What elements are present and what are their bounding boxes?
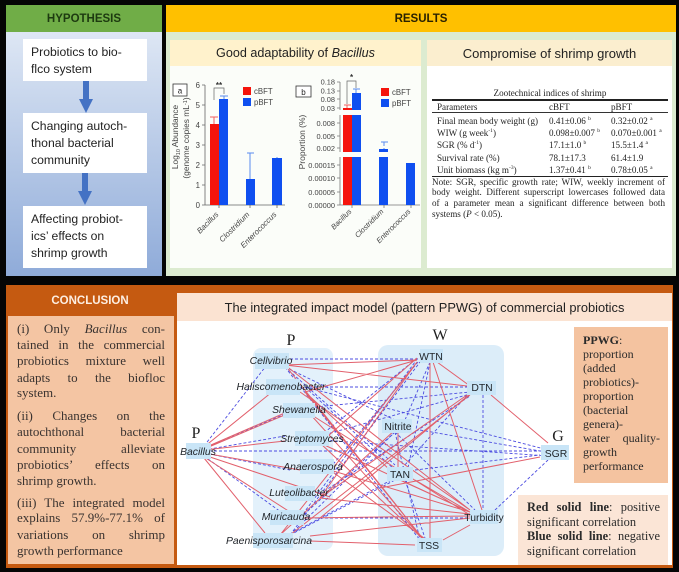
panel: hypothesis [6, 5, 162, 276]
group letters: G [552, 428, 564, 445]
text block: conclusion point i: probiotics mixture well [17, 353, 165, 368]
table: zootechnical indices: cBFT [549, 102, 570, 112]
panel: good adaptability of Bacillus [170, 40, 421, 268]
chart b: proportion bar chart: b [301, 88, 306, 97]
heading: hypothesis [6, 5, 162, 32]
chart a: log abundance bar chart: a [178, 86, 183, 96]
arrow: hypothesis step 1 to 2 [79, 81, 93, 113]
node backgrounds [186, 349, 569, 552]
group letters: P [287, 332, 296, 349]
legend: line colours: significant correlation [527, 544, 636, 558]
callout: PPWG definition: genera)- [583, 417, 623, 431]
text block: conclusion point ii: probiotics’ effects on [17, 457, 165, 472]
panel: results [166, 5, 676, 276]
table: zootechnical indices: pBFT [611, 102, 632, 112]
chart b: proportion bar chart: 0.00010 [308, 174, 335, 183]
node labels: bacterial genera [180, 356, 344, 547]
chart a: log abundance bar chart: 5 [196, 101, 201, 110]
text block: conclusion point ii: shrimp growth. [17, 473, 96, 488]
table: zootechnical indices: Parameters [437, 102, 477, 112]
chart b: proportion bar chart: 0.08 [321, 95, 335, 104]
group letters: P [192, 425, 201, 442]
chart a: log abundance bar chart: 3 [196, 141, 200, 150]
arrow: hypothesis step 2 to 3 [78, 173, 92, 205]
node labels: water quality and growth: TAN [390, 470, 410, 481]
table: zootechnical indices: 78.1±17.3 [549, 153, 586, 163]
table: zootechnical indices: Note: SGR, specific growth rate; WIW, weekly increment of [432, 177, 665, 187]
text block: affecting probiotics effects [23, 206, 147, 268]
heading: conclusion: CONCLUSION [51, 294, 129, 306]
table: zootechnical indices: Final mean body weight (g) [437, 116, 538, 126]
text block: changing bacterial community [23, 113, 147, 173]
callout: PPWG definition: probiotics)- [583, 375, 639, 389]
text block: conclusion point iii: (iii) The integrated model [17, 495, 165, 510]
table: zootechnical indices: Zootechnical indices of shrimp [494, 88, 606, 98]
callout: PPWG definition: growth [583, 445, 617, 459]
node labels: bacterial genera: Paenisporosarcina [226, 536, 312, 547]
group letters [192, 327, 564, 445]
panel: conclusion [6, 285, 673, 568]
callout: PPWG definition: (added [583, 361, 616, 375]
text block: probiotics to biofloc system: Probiotics to bio- [31, 45, 122, 59]
callout: PPWG definition [574, 327, 668, 483]
legend: line colours: significant correlation [527, 515, 636, 529]
node labels: bacterial genera: Streptomyces [280, 434, 344, 445]
node labels: water quality and growth [384, 352, 568, 552]
node labels: bacterial genera: Bacillus [180, 447, 216, 458]
chart b: proportion bar chart: 0.008 [316, 119, 335, 128]
chart b: proportion bar chart: 0.002 [316, 144, 335, 153]
group letters: W [432, 327, 448, 344]
node labels: water quality and growth: SGR [545, 449, 568, 460]
chart b: proportion bar chart: cBFT [392, 88, 411, 97]
heading: integrated impact model [177, 293, 672, 321]
table: zootechnical indices: 0.098±0.007 b [549, 128, 600, 138]
chart b: proportion bar chart: 0.00000 [308, 201, 335, 210]
text block: conclusion body [8, 316, 174, 564]
text block: changing bacterial community: thonal bacterial [31, 136, 114, 150]
chart a: log abundance bar chart: 4 [196, 121, 201, 130]
heading: compromise of shrimp growth [427, 40, 672, 66]
text block: conclusion point ii: community alleviate [17, 441, 165, 456]
heading: results [166, 5, 676, 32]
chart b: proportion bar chart: 0.18 [321, 78, 335, 86]
panel: integrated impact model [177, 293, 672, 565]
node labels: water quality and growth: Nitrite [384, 422, 412, 433]
chart b: proportion bar chart: Clostridium [353, 207, 385, 240]
chart a: log abundance bar chart: cBFT [254, 87, 273, 96]
node labels: bacterial genera: Haliscomenobacter [237, 382, 326, 393]
callout: PPWG definition: (bacterial [583, 403, 628, 417]
chart b: proportion bar chart: * [350, 73, 354, 82]
text block: conclusion point i: tained in the commercial [17, 337, 165, 352]
chart a: log abundance bar chart: (genome copies mL [181, 105, 191, 179]
node labels: bacterial genera: Muricauda [262, 512, 310, 523]
chart b: proportion bar chart: 0.00005 [308, 188, 335, 197]
table: zootechnical indices [432, 88, 668, 219]
negative correlation lines [204, 359, 548, 540]
chart a: log abundance bar chart: Enterococcus [239, 210, 278, 250]
legend: line colours [518, 495, 668, 565]
text block: conclusion point iii: variations on shrimp [17, 527, 165, 542]
chart b: proportion bar chart: 0.005 [316, 132, 335, 141]
node labels: bacterial genera: Shewanella [272, 405, 326, 416]
heading: good adaptability: Good adaptability of Bacillus [216, 46, 375, 60]
text block: conclusion point i: adapts to the biofloc [17, 370, 165, 385]
table: zootechnical indices: 61.4±1.9 [611, 153, 643, 163]
node labels: water quality and growth: WTN [419, 352, 443, 363]
table: zootechnical indices: WIW (g week-1) [437, 128, 496, 138]
text block: changing bacterial community: community [31, 153, 90, 167]
table: zootechnical indices: 1.37±0.41 b [549, 165, 591, 175]
table: zootechnical indices: 17.1±1.0 b [549, 140, 586, 150]
chart a: log abundance bar chart: Bacillus [195, 210, 220, 235]
table: zootechnical indices: SGR (% d-1) [437, 140, 482, 150]
chart a: log abundance bar chart: 0 [196, 201, 201, 210]
text block: conclusion point ii [17, 408, 165, 488]
text block: conclusion point iii [17, 495, 165, 558]
node labels: bacterial genera: Cellvibrio [250, 356, 293, 367]
node labels: water quality and growth: TSS [419, 541, 439, 552]
node labels: water quality and growth: DTN [471, 383, 493, 394]
text block: conclusion point i: (i) Only Bacillus con- [17, 321, 165, 336]
heading: compromise of shrimp growth: Compromise of shrimp growth [463, 46, 636, 60]
text block: conclusion point ii: (ii) Changes on the [17, 408, 165, 423]
chart a: log abundance bar chart: ** [216, 81, 223, 90]
text block: affecting probiotics effects: Affecting probiot- [31, 212, 123, 226]
text block: conclusion point i [17, 321, 165, 400]
chart b: proportion bar chart: Bacillus [329, 207, 354, 231]
table: zootechnical indices: 0.41±0.06 b [549, 116, 591, 126]
text block: changing bacterial community: Changing autoch- [31, 119, 127, 133]
panel: compromise of shrimp growth [427, 40, 672, 268]
table: zootechnical indices: 0.070±0.001 a [611, 128, 662, 138]
callout: PPWG definition: PPWG: [583, 333, 622, 347]
table: zootechnical indices: systems (P < 0.05). [432, 209, 503, 219]
heading: results: RESULTS [395, 12, 447, 24]
callout: PPWG definition: performance [583, 459, 644, 473]
text block: affecting probiotics effects: shrimp growth [31, 246, 108, 260]
table: zootechnical indices: Unit biomass (kg m-3) [437, 165, 517, 175]
text block: conclusion point iii: growth performance [17, 543, 123, 558]
chart b: proportion bar chart: pBFT [392, 99, 411, 108]
heading: integrated impact model: The integrated impact model (pattern PPWG) of commercial probiotics [225, 300, 624, 314]
text block: conclusion point ii: autochthonal bacterial [17, 424, 165, 439]
legend: line colours: Red solid line: positive [527, 500, 660, 514]
text block: affecting probiotics effects: ics’ effects on [31, 229, 104, 243]
chart a: log abundance bar chart: Log [170, 155, 180, 169]
chart b: proportion bar chart: Enterococcus [374, 207, 413, 245]
chart a: log abundance bar chart: 10 [176, 149, 182, 155]
callout: PPWG definition: proportion [583, 347, 634, 361]
chart a: log abundance bar chart: 2 [196, 161, 200, 170]
text block: conclusion point iii: explains 57.9%-77.1% of [17, 510, 165, 525]
table: zootechnical indices: body weight. Different superscript lowercases followed data [432, 187, 665, 197]
positive correlation lines [204, 358, 548, 545]
chart a: log abundance bar chart: Abundance [170, 104, 180, 149]
chart a: log abundance bar chart: ) [181, 97, 191, 100]
callout: PPWG definition: proportion [583, 389, 634, 403]
heading: good adaptability [170, 40, 421, 66]
callout: PPWG definition: water quality- [583, 431, 660, 445]
chart a: log abundance bar chart: Clostridium [217, 210, 252, 244]
chart a: log abundance bar chart: -1 [183, 100, 189, 105]
node labels: bacterial genera: Luteolibacter [269, 488, 329, 499]
table: zootechnical indices: 0.78±0.05 a [611, 165, 653, 175]
chart a: log abundance bar chart: pBFT [254, 98, 273, 107]
chart b: proportion bar chart: 0.00015 [308, 161, 335, 170]
chart b: proportion bar chart: Proportion (%) [297, 114, 307, 169]
table: zootechnical indices: of a parameter mean a significant difference between both [432, 198, 665, 208]
chart b: proportion bar chart: 0.13 [321, 86, 335, 96]
node labels: bacterial genera: Anaerospora [282, 462, 343, 473]
legend: line colours: Blue solid line: negative [527, 529, 660, 543]
text block: probiotics to biofloc system [23, 39, 147, 81]
node labels: water quality and growth: Turbidity [464, 513, 505, 524]
chart a: log abundance bar chart: 6 [196, 81, 200, 90]
table: zootechnical indices: 15.5±1.4 a [611, 140, 648, 150]
text block: probiotics to biofloc system: flco system [31, 62, 92, 76]
table: zootechnical indices: Survival rate (%) [437, 153, 500, 163]
chart a: log abundance bar chart: 1 [196, 181, 200, 190]
chart b: proportion bar chart: 0.03 [321, 104, 335, 113]
heading: hypothesis: HYPOTHESIS [47, 12, 121, 24]
text block: conclusion point i: system. [17, 385, 56, 400]
table: zootechnical indices: 0.32±0.02 a [611, 116, 653, 126]
